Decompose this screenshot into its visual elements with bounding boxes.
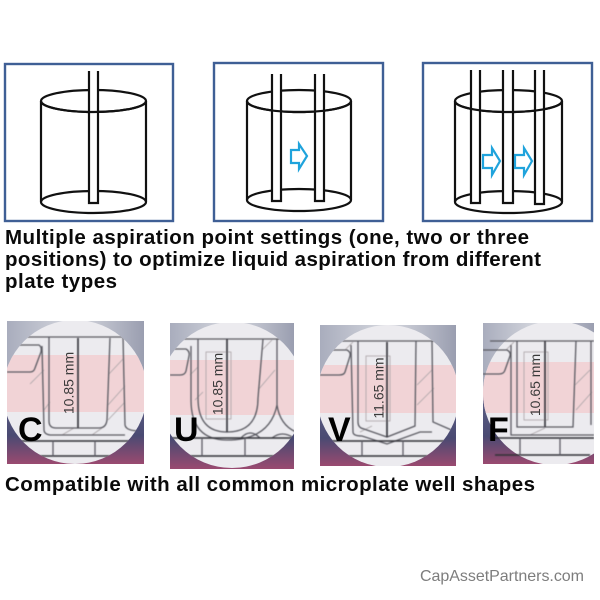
panel: well shape U bbox=[170, 323, 294, 469]
rim front arc 1 bbox=[41, 101, 146, 112]
photo background U bbox=[170, 323, 294, 469]
photo background V bbox=[317, 325, 459, 467]
arrows 3 bbox=[483, 148, 532, 175]
caption: aspiration points: Multiple aspiration point settings (one, two or three bbox=[5, 226, 529, 249]
caption: aspiration points: plate types bbox=[5, 270, 117, 293]
panel: two aspiration positions bbox=[214, 63, 383, 221]
well drawing C bbox=[7, 336, 136, 458]
photo background C bbox=[3, 320, 147, 464]
frame 1 bbox=[5, 64, 173, 221]
cylinder 1 bbox=[41, 90, 146, 213]
pink band V bbox=[320, 365, 456, 413]
measurement C: 10.85 mm bbox=[60, 352, 76, 414]
rim front arc 3 bbox=[455, 101, 562, 112]
well drawing F bbox=[483, 341, 594, 455]
letter U: U bbox=[174, 411, 199, 449]
well drawing V bbox=[315, 341, 456, 456]
caption: well shapes: Compatible with all common microplate well shapes bbox=[5, 473, 535, 496]
cylinder 2 bbox=[247, 90, 351, 211]
photo background F bbox=[483, 321, 600, 465]
measurement F: 10.65 mm bbox=[527, 354, 543, 416]
arrow 2 bbox=[291, 144, 307, 169]
pink band U bbox=[170, 360, 294, 415]
letter F: F bbox=[488, 411, 509, 449]
letter C: C bbox=[18, 411, 43, 449]
panel: one aspiration position bbox=[5, 64, 173, 221]
panel: well shape C bbox=[0, 320, 150, 464]
pink band F bbox=[483, 362, 594, 413]
panel: three aspiration positions bbox=[423, 63, 592, 221]
pipettes 3 bbox=[471, 70, 544, 204]
caption: aspiration points: positions) to optimize liquid aspiration from different bbox=[5, 248, 541, 271]
pink band C bbox=[7, 355, 144, 412]
watermark: CapAssetPartners.com bbox=[420, 568, 584, 585]
frame 3 bbox=[423, 63, 592, 221]
measurement U: 10.85 mm bbox=[210, 353, 226, 415]
cylinder 3 bbox=[455, 90, 562, 213]
measurement V: 11.65 mm bbox=[370, 357, 386, 419]
letter V: V bbox=[328, 411, 351, 449]
well drawing U bbox=[160, 339, 296, 456]
rim front arc 2 bbox=[247, 101, 351, 112]
frame 2 bbox=[214, 63, 383, 221]
pipettes 2 bbox=[272, 74, 324, 201]
panel: well shape F bbox=[483, 321, 600, 465]
pipette 1 bbox=[89, 71, 98, 203]
panel: well shape V bbox=[315, 325, 459, 467]
